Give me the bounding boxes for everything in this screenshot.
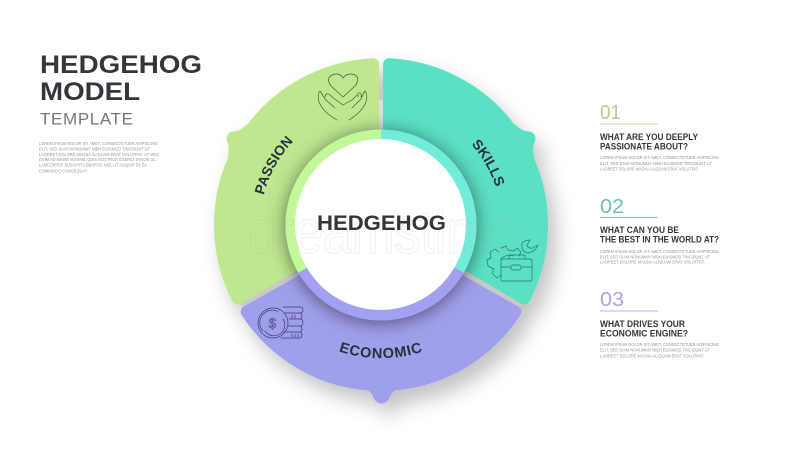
watermark: dreamstime bbox=[248, 198, 518, 267]
intro text block: LAOREET DOLORE MAGNA ALIQUAM ERAT VOLUTPAT. UT WISI bbox=[39, 152, 159, 157]
intro text block: COMMODO CONSEQUAT. bbox=[39, 168, 88, 173]
intro text block: ELIT, SED DIAM NONUMMY NIBH EUISMOD TINCIDUNT UT bbox=[39, 146, 150, 151]
item 01: ELIT, SED DIAM NONUMMY NIBH EUISMOD TINCIDUNT UT bbox=[600, 161, 712, 166]
item 01: 01 bbox=[600, 102, 621, 124]
intro text block: LAMCORPER SUSCIPIT LOBORTIS NISL UT ALIQUIP EX EA bbox=[39, 163, 148, 168]
item 02: WHAT CAN YOU BE bbox=[600, 225, 679, 235]
item 01: LOREM IPSUM DOLOR SIT AMET, CONSECTETUER ADIPISCING bbox=[600, 155, 719, 160]
item 01: PASSIONATE ABOUT? bbox=[600, 142, 688, 152]
label: passion: PASSION bbox=[254, 136, 293, 194]
label: skills: SKILLS bbox=[472, 140, 504, 186]
intro text block bbox=[39, 141, 159, 173]
item 03: LAOREET DOLORE MAGNA ALIQUAM ERAT VOLUTPAT. bbox=[600, 353, 704, 358]
item 03: 03 bbox=[600, 289, 624, 311]
hedgehog wheel bbox=[212, 58, 566, 422]
icon: hands holding heart bbox=[318, 74, 367, 120]
intro text block: ENIM AD MINIM VENIAM, QUIS NOSTRUD EXERCI TATION UL- bbox=[39, 157, 157, 162]
segment: economic bbox=[247, 272, 515, 404]
segment: passion bbox=[220, 64, 373, 298]
item 03 bbox=[600, 289, 719, 358]
icon: gear and briefcase bbox=[487, 240, 538, 281]
item 03: ECONOMIC ENGINE? bbox=[600, 328, 688, 338]
item 01 bbox=[600, 102, 719, 172]
label: economic: ECONOMIC bbox=[340, 342, 422, 358]
item 03: LOREM IPSUM DOLOR SIT AMET, CONSECTETUER ADIPISCING bbox=[600, 342, 719, 347]
item 01: WHAT ARE YOU DEEPLY bbox=[600, 132, 698, 142]
title bbox=[40, 51, 202, 128]
center label: HEDGEHOG bbox=[317, 212, 446, 235]
title: MODEL bbox=[40, 78, 140, 106]
title: TEMPLATE bbox=[40, 110, 133, 128]
item 02 bbox=[600, 196, 719, 265]
segment group with shadow bbox=[220, 64, 542, 403]
icon: coin and stack: $ bbox=[268, 315, 276, 331]
item 03: WHAT DRIVES YOUR bbox=[600, 319, 685, 329]
center ring bbox=[285, 129, 477, 320]
title: HEDGEHOG bbox=[40, 51, 202, 79]
item 03: ELIT, SED DIAM NONUMMY NIBH EUISMOD TINCIDUNT UT bbox=[600, 348, 710, 353]
intro text block: LOREM IPSUM DOLOR SIT AMET, CONSECTETUER ADIPISCING bbox=[39, 141, 158, 146]
item 02: THE BEST IN THE WORLD AT? bbox=[600, 234, 719, 244]
item 02: LAOREET DOLORE MAGNA ALIQUAM ERAT VOLUTPAT. bbox=[600, 260, 705, 265]
segment: skills bbox=[389, 64, 542, 298]
center white circle bbox=[295, 139, 466, 310]
item 02: ELIT, SED DIAM NONUMMY NIBH EUISMOD TINCIDUNT UT bbox=[600, 254, 710, 259]
item 01: LAOREET DOLORE MAGNA ALIQUAM ERAT VOLUTPAT. bbox=[600, 166, 699, 172]
item 02: LOREM IPSUM DOLOR SIT AMET, CONSECTETUER ADIPISCING bbox=[600, 249, 719, 254]
icon: coin and stack bbox=[258, 307, 303, 338]
item 02: 02 bbox=[600, 196, 624, 218]
